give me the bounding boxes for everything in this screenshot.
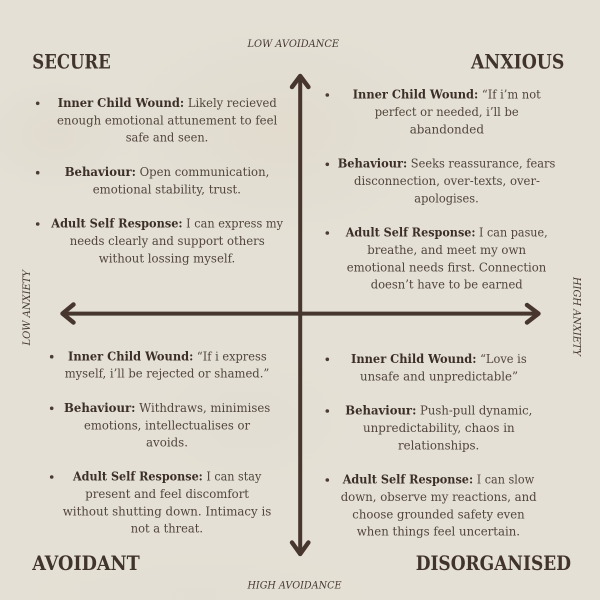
vertical axis arrow — [292, 76, 308, 554]
avoidant: behaviour: emotions, intellectualises or — [84, 418, 250, 432]
avoidant: inner child wound — [50, 348, 269, 381]
avoidant: behaviour: Behaviour: Withdraws, minimises — [64, 400, 270, 415]
disorganised: behaviour: relationships. — [398, 438, 479, 452]
avoidant: adult self response: present and feel discomfort — [85, 487, 249, 501]
heading: secure: SECURE — [32, 51, 111, 74]
anxious: adult self response: breathe, and meet my own — [367, 243, 526, 257]
anxious: inner child wound: Inner Child Wound: “If i’m not — [353, 87, 541, 102]
disorganised: behaviour: Behaviour: Push-pull dynamic, — [345, 403, 532, 418]
axis label: low anxiety: LOW ANXIETY — [21, 269, 33, 346]
horizontal axis arrow — [62, 304, 538, 322]
anxious: adult self response: Adult Self Response: I can pasue, — [345, 225, 548, 240]
heading: disorganised: DISORGANISED — [416, 552, 571, 575]
secure: behaviour: Behaviour: Open communication, — [65, 164, 269, 179]
anxious: inner child wound: abandonded — [410, 122, 484, 136]
secure: behaviour — [36, 164, 269, 196]
anxious: adult self response — [326, 225, 548, 292]
anxious: inner child wound: perfect or needed, i’ll be — [375, 105, 519, 119]
panel: secure — [32, 51, 283, 265]
disorganised: behaviour — [326, 403, 532, 452]
secure: adult self response — [36, 216, 283, 265]
avoidant: adult self response: Adult Self Response: I can stay — [72, 469, 261, 484]
disorganised: adult self response — [326, 472, 537, 539]
anxious: behaviour: Behaviour: Seeks reassurance, fears — [338, 156, 555, 171]
avoidant: behaviour: avoids. — [146, 436, 188, 450]
heading: avoidant: AVOIDANT — [31, 552, 140, 575]
anxious: inner child wound — [326, 87, 541, 136]
avoidant: inner child wound: myself, i’ll be rejected or shamed.” — [65, 367, 269, 381]
panel: avoidant — [31, 348, 271, 575]
avoidant: behaviour — [50, 400, 270, 450]
disorganised: inner child wound: unsafe and unpredictable” — [360, 369, 518, 383]
secure: adult self response: without lossing myself. — [99, 251, 235, 265]
anxious: behaviour: disconnection, over-texts, over- — [354, 174, 540, 188]
secure: inner child wound: safe and seen. — [126, 131, 208, 145]
disorganised: adult self response: choose grounded safety even — [352, 507, 525, 521]
heading: anxious: ANXIOUS — [470, 51, 564, 74]
disorganised: adult self response: when things feel uncertain. — [357, 525, 520, 539]
anxious: behaviour: apologises. — [414, 191, 479, 205]
secure: adult self response: Adult Self Response: I can express my — [50, 216, 283, 231]
disorganised: adult self response: Adult Self Response: I can slow — [342, 472, 535, 487]
axis label: high avoidance: HIGH AVOIDANCE — [247, 580, 342, 592]
panel: disorganised — [326, 351, 571, 575]
secure: adult self response: needs clearly and support others — [70, 234, 265, 248]
disorganised: behaviour: unpredictability, chaos in — [363, 421, 515, 435]
avoidant: inner child wound: Inner Child Wound: “If i express — [68, 348, 267, 363]
avoidant: adult self response — [50, 469, 271, 536]
secure: inner child wound — [36, 95, 277, 145]
anxious: adult self response: emotional needs first. Connection — [347, 260, 546, 274]
disorganised: adult self response: down, observe my reactions, and — [341, 490, 537, 504]
disorganised: inner child wound: Inner Child Wound: “Love is — [351, 351, 527, 366]
anxious: adult self response: doesn’t have to be earned — [371, 278, 523, 292]
panel: anxious — [326, 51, 564, 292]
disorganised: inner child wound — [326, 351, 527, 383]
secure: behaviour: emotional stability, trust. — [93, 182, 241, 196]
anxious: behaviour — [326, 156, 555, 205]
secure: inner child wound: enough emotional attunement to feel — [57, 113, 277, 127]
axis label: low avoidance: LOW AVOIDANCE — [247, 38, 339, 50]
avoidant: adult self response: without shutting down. Intimacy is — [63, 504, 271, 518]
secure: inner child wound: Inner Child Wound: Likely recieved — [58, 95, 277, 110]
avoidant: adult self response: not a threat. — [131, 522, 203, 536]
axis label: high anxiety: HIGH ANXIETY — [570, 276, 582, 357]
